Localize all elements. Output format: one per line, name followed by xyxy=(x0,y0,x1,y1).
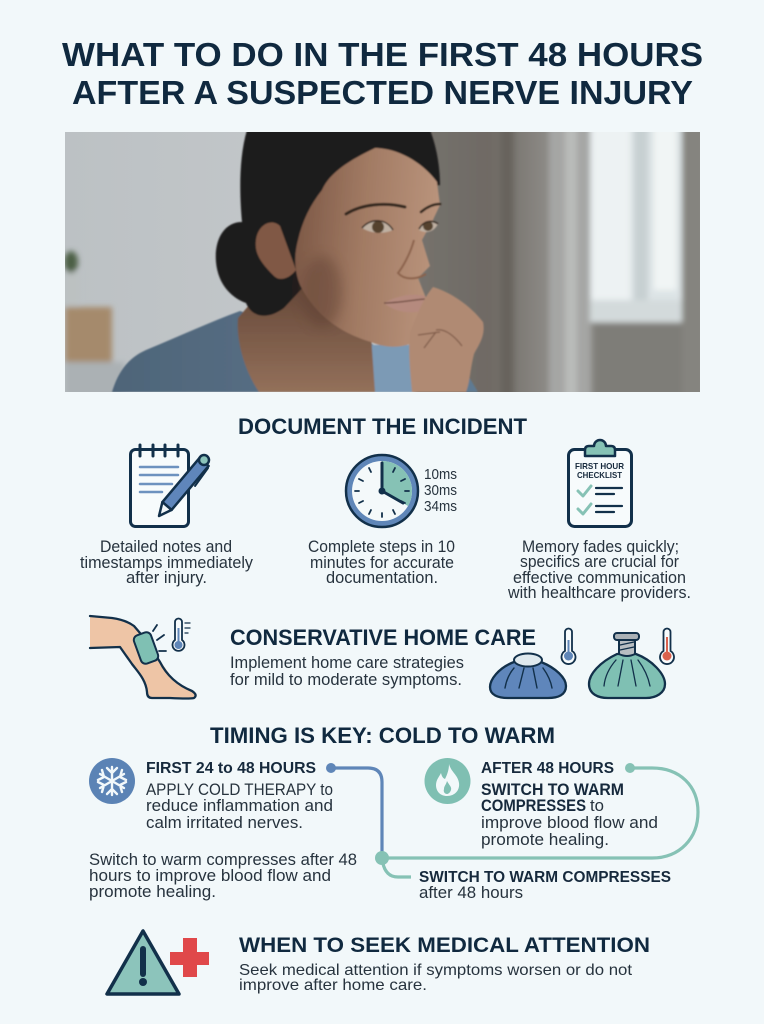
text: memory fades: Memory fades quickly; xyxy=(522,538,679,556)
icon: first hour checklist clipboard xyxy=(568,440,632,526)
text: switch to warm paragraph xyxy=(89,850,357,901)
text: memory fades xyxy=(507,538,691,602)
text: after 48 hours: improve blood flow and xyxy=(481,813,658,832)
text: memory fades: specifics are crucial for xyxy=(520,553,679,571)
icon: first hour checklist clipboard: FIRST HOUR xyxy=(575,461,624,471)
connector: blue line from cold phase xyxy=(326,763,382,858)
icon: blue cold pack with thermometer xyxy=(490,629,576,698)
clock time labels: 30ms xyxy=(424,482,457,499)
clock time labels: 10ms xyxy=(424,466,457,483)
title: WHAT TO DO IN THE FIRST 48 HOURS xyxy=(62,37,703,74)
text: switch to warm compresses callout: after 48 hours xyxy=(419,883,523,902)
face xyxy=(295,148,440,347)
icon: teal warm pack with thermometer xyxy=(589,629,674,698)
text: after 48 hours: COMPRESSES xyxy=(481,797,586,815)
text: first 24 to 48 hours: calm irritated nerves. xyxy=(146,813,303,832)
neck xyxy=(237,288,376,392)
clock time labels: 34ms xyxy=(424,498,457,515)
text: memory fades: effective communication xyxy=(513,569,686,587)
person xyxy=(112,130,484,392)
shirt xyxy=(112,311,478,392)
text: memory fades: with healthcare providers. xyxy=(507,584,691,602)
text: switch to warm paragraph: Switch to warm compresses after 48 xyxy=(89,850,357,869)
text: first 24 to 48 hours: APPLY COLD THERAPY to xyxy=(146,780,333,799)
text: detailed notes: timestamps immediately xyxy=(80,554,254,572)
text: seek medical attention: Seek medical attention if symptoms worsen or do not xyxy=(239,962,633,979)
icon: notepad and pen xyxy=(130,445,209,526)
text: detailed notes: after injury. xyxy=(126,569,207,587)
text: detailed notes: Detailed notes and xyxy=(100,538,232,556)
text: complete steps: minutes for accurate xyxy=(310,554,454,572)
title xyxy=(62,37,703,112)
icon: snowflake xyxy=(89,758,135,804)
text: switch to warm paragraph: promote healing. xyxy=(89,882,216,901)
text: complete steps: Complete steps in 10 xyxy=(308,538,455,556)
text: seek medical attention: improve after home care. xyxy=(239,977,427,994)
heading: document the incident: DOCUMENT THE INCIDENT xyxy=(238,414,528,439)
text: after 48 hours xyxy=(481,760,658,849)
hand xyxy=(409,287,484,392)
lips xyxy=(386,296,415,312)
text: detailed notes xyxy=(80,538,254,587)
icon: flame xyxy=(424,758,470,804)
title: AFTER A SUSPECTED NERVE INJURY xyxy=(72,75,693,112)
text: seek medical attention xyxy=(239,962,633,994)
text: after 48 hours: AFTER 48 HOURS xyxy=(481,760,614,777)
hair back and bun xyxy=(216,130,440,316)
text: after 48 hours: to xyxy=(590,796,604,815)
cheek shadow xyxy=(302,256,342,328)
text: implement home care: for mild to moderate symptoms. xyxy=(230,670,462,689)
text: first 24 to 48 hours xyxy=(146,760,333,832)
heading: when to seek medical attention: WHEN TO SEEK MEDICAL ATTENTION xyxy=(239,933,650,957)
text: complete steps: documentation. xyxy=(326,569,438,587)
nose shading xyxy=(398,240,426,278)
icon: warning triangle and medical cross xyxy=(107,931,209,994)
text: implement home care: Implement home care strategies xyxy=(230,653,464,672)
text: switch to warm paragraph: hours to improve blood flow and xyxy=(89,866,331,885)
clock time labels xyxy=(424,466,457,515)
text: switch to warm compresses callout: SWITCH TO WARM COMPRESSES xyxy=(419,869,671,886)
text: first 24 to 48 hours: reduce inflammation and xyxy=(146,796,333,815)
icon: first hour checklist clipboard: CHECKLIST xyxy=(577,470,623,480)
icon: leg with cold pack and thermometer xyxy=(90,616,196,698)
heading: timing is key: TIMING IS KEY: COLD TO WARM xyxy=(210,723,555,748)
photo: worried woman looking out of a window xyxy=(64,125,706,400)
text: implement home care xyxy=(230,653,464,689)
eyebrows and eyes xyxy=(346,204,405,214)
text: first 24 to 48 hours: FIRST 24 to 48 HOURS xyxy=(146,760,316,777)
text: after 48 hours: SWITCH TO WARM xyxy=(481,781,624,799)
ear xyxy=(256,222,296,279)
heading: conservative home care: CONSERVATIVE HOME CARE xyxy=(230,625,536,650)
text: after 48 hours: promote healing. xyxy=(481,830,609,849)
connector: teal line from warm phase xyxy=(375,763,698,877)
icon: clock with first section shaded xyxy=(346,455,418,527)
text: complete steps xyxy=(308,538,455,587)
text: switch to warm compresses callout xyxy=(419,869,671,902)
